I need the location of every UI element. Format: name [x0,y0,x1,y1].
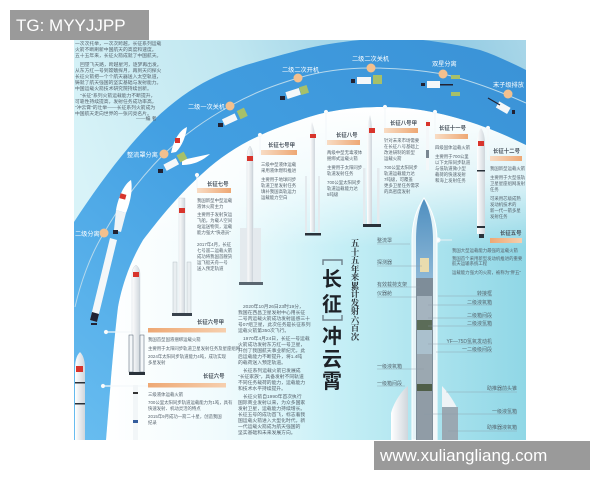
callouts: Long March 5 left: 整流罩 [377,237,392,244]
infographic background [74,40,526,440]
text block: editor's note: "长征"系列火箭运载能力不断提升， [80,92,155,99]
text block: main article: 长征五号的成功首飞，标志着我 [238,411,305,418]
callout leader lines [102,106,490,388]
icon: spacecraft stage 3 [351,75,382,84]
callouts: Long March 5 right [424,290,517,431]
text block: main article: 长征火箭自1990年首次执行 [243,393,302,400]
text: Long March 8: 主要用于太阳同步 [327,164,363,171]
text: Long March 8A: 的高密度发射 [384,188,411,195]
text: Long March 7A: 三级中型液体运载 [261,161,297,168]
text block: main article: 1970年4月24日，长征一号运载 [243,335,310,342]
labels: flight events: 整流罩分离 [127,151,158,159]
heading: Long March 6A [148,318,226,332]
subtitle: vertical: 五 [351,255,360,265]
subtitle: vertical: 五 [351,238,360,248]
text block: editor's note: 长征火箭把一个个航天器送入太空轨道， [75,73,161,80]
rocket: Long March 11 [426,120,430,170]
rocket: Long March 8 [305,122,321,236]
text: Long March 6: 2015年9月成功一箭二十星，创造我国 [148,413,222,420]
text block: editor's note: 中国航天走向世界的一张闪亮名片。 [75,110,152,117]
rocket: Long March 6A [129,265,145,375]
text: Long March 11 [435,144,471,184]
text block: main article: 发射卫星，运载能力持续增长。 [238,405,305,412]
text block: main article: 和技术水平持续提升。 [238,385,286,392]
text block: editor's note: 五十五年来，长征火箭成就了中国航天。 [75,52,161,59]
text block: main article: 的载荷送入预定轨道。 [238,359,286,366]
text: Long March 7: 运飞船天舟一号 [197,259,228,266]
text: Long March 11: 载荷的快速发射 [435,171,466,178]
title: Long March rises to the clouds: 霄 [322,370,342,393]
panel: white glow under arc [106,107,526,440]
text: Long March 5: 我国大型运载能力最强的运载火箭 [452,247,518,254]
text: Long March 7A: 运载能力空白 [261,194,287,201]
text block: editor's note: 火箭不断刷新中国航天的高度和速度。 [75,46,157,53]
rocket: Long March 6 [133,385,138,440]
text block: main article: 开创了我国航天事业新纪元，此 [238,347,305,354]
text block: editor's note: 一次次托举，一次次跨越，长征系列运载 [75,40,162,47]
text: Long March 8: 700公里太阳同步 [327,179,361,186]
text block: main article: 坚实基础和未来发展方向。 [238,429,296,436]
text: Long March 6: 700公里太阳同步轨道运载能力为1吨，具有 [148,399,233,406]
watermark: website: www.xuliangliang.com [379,446,547,465]
text: Long March 12: 主要用于大型低轨 [490,174,526,181]
text block: main article: 长征系列运载火箭已发展成 [243,367,301,374]
icon: separated rocket top [113,180,132,234]
text block: editor's note: 铸就了航天强国的坚实基础与发射能力。 [75,79,161,86]
text: Long March 11: 主要用于700公里 [435,153,469,160]
title: Long March rises to the clouds [322,260,342,393]
icon: spacecraft stage 1 [218,108,248,127]
rocket: lower-left launcher [75,352,85,440]
text block: main article: 火箭成功发射东方红一号卫星， [238,341,305,348]
rocket: Long March 7A [239,146,263,285]
text: Long March 7: 主要用于发射货运 [197,211,233,218]
subtitle: vertical: 十 [351,247,360,257]
text: Long March 8A [384,137,420,195]
icon: spacecraft stage 2 [280,85,309,100]
text: Long March 12: 卫星星座组网发射 [490,180,526,187]
watermark: TG label [10,10,149,40]
text block: main article: "长征家族"，具备发射不同轨道 [238,373,304,380]
text: Long March 7A: 主要用于地球同步 [261,176,297,183]
labels: flight events: 双星分离 [432,60,457,68]
icon: fairing separation [158,127,210,173]
text: Long March 12 [490,165,526,220]
text block: main article: 我国在西昌卫星发射中心用长征 [238,309,305,316]
text: Long March 7: 站运送物资，运载 [197,223,233,230]
text block: editor's note: ——编 者 [136,115,157,122]
text: Long March 12: 新一代一箭多星 [490,207,521,214]
text: Long March 7: 飞船，为载人空间 [197,217,232,224]
heading: Long March 8A: 长征八号甲 [390,119,417,127]
text: Long March 8: 捆绑式运载火箭 [327,155,358,162]
callouts: Long March 5 left: 探测器 [377,259,392,266]
text: Long March 8: 5吨级 [327,191,339,198]
text: Long March 7: 七号遥二运载火箭 [197,247,233,254]
text: Long March 7: 成功将我国首艘货 [197,253,233,260]
callouts: Long March 5 right: 一二级级间段 [462,346,492,353]
callouts: Long March 5 right: 助推器液氧箱 [487,424,517,431]
text: Long March 6A [148,336,241,366]
text: Long March 6A: 主要用于太阳同步轨道卫星发射任务及星座组网 [148,345,241,352]
text: Long March 6A: 多星发射 [148,359,166,366]
text block: main article: 二号丙运载火箭成功发射遥感三十 [238,315,310,322]
heading: Long March 11: 长征十一号 [439,124,467,132]
text block: editor's note: "冲云霄"的壮举——长征系列火箭成为 [75,104,155,111]
text: Long March 7A: 采用液体燃料推进 [261,167,297,174]
rocket: Long March 12 [477,128,485,238]
text: Long March 8A: 在长征八号基础上 [384,143,420,150]
heading: Long March 6A: 长征六号甲 [197,318,224,326]
text: Long March 7A: 填补我国高轨运力 [261,188,296,195]
infographic artwork [74,40,526,440]
heading: Long March 5: 长征五号 [500,229,522,237]
callouts: Long March 5 left: 有效载荷支架 [377,281,407,288]
heading: Long March 8 [327,131,360,145]
text: Long March 7A [261,161,297,201]
text block: main article: 后运载能力不断提升，将1.4吨 [238,353,302,360]
text: Long March 6A: 2024年太阳同步轨道能力4吨，成功实现 [148,353,227,360]
text: Long March 8A: 针对未来市场需要 [384,137,420,144]
text: Long March 7: 送入预定轨道 [197,265,224,272]
rocket: Long March 5 left booster [391,386,408,440]
callouts: Long March 5 left [377,237,424,387]
subtitle: vertical: 年 [351,264,360,274]
text block: editor's note: 中国运载火箭技术研究院持续创新。 [75,85,152,92]
text: Long March 12: 我国新型运载火箭 [490,165,526,172]
heading: Long March 7A: 长征七号甲 [268,141,295,149]
text: Long March 11: 与低轨道微小型 [435,165,466,172]
text: Long March 8A: 运载火箭 [384,155,402,162]
labels: flight events: 二级分离 [75,230,100,238]
title: Long March rises to the clouds: 长 [322,268,342,291]
text: Long March 12: 发动机技术的 [490,201,517,208]
text block: editor's note [75,40,162,122]
text: Long March 11: 四级固体运载火箭 [435,144,471,151]
subtitle: vertical: 百 [351,323,360,333]
text block: main article: 国际商业发射以来，为众多国家 [238,399,305,406]
rocket: Long March 7 [172,198,192,316]
icon: separated rocket lower stage [90,238,117,325]
panel: inner sky area [106,107,526,440]
text: Long March 6: 纪录 [148,419,157,425]
text: Long March 6A: 我国首型固液捆绑运载火箭 [148,336,201,343]
labels: flight events: 二级二次关机 [352,55,390,63]
text: Long March 6: 三级液体运载火箭 [148,391,184,398]
title: Long March rises to the clouds: 征 [322,293,342,316]
text: Long March 8: 两级中型无毒液体 [327,149,363,156]
labels: flight events: 二级一次关机 [188,103,226,111]
callouts: Long March 5 right: 一级液氢箱 [492,408,517,415]
labels: flight events [75,55,524,238]
text: Long March 12: 发射任务 [490,213,508,220]
text: Long March 8A: 7吨级，可覆盖 [384,176,413,183]
text: Long March 12: 任务 [490,186,499,193]
text: Long March 6: 快速发射、机动灵活的特点 [148,405,201,412]
subtitle: vertical: 次 [351,332,360,342]
text block: main article: 不同任务载荷的能力，运载能力 [238,379,305,386]
subtitle: vertical [351,238,361,342]
title: Long March rises to the clouds: 冲 [322,325,342,348]
text: Long March 6 [148,391,233,425]
text block: main article: 国运载火箭进入大型化时代，新 [238,417,305,424]
heading: Long March 7 [197,180,231,193]
text: Long March 7: 2017年4月，长征 [197,241,232,248]
node: fairing / stage events [100,64,512,238]
labels: flight events: 末子级排放 [493,81,524,89]
text: Long March 7: 能力强大"快递员" [197,229,231,236]
text: Long March 8 [327,149,363,198]
text block: main article: 2020年10月26日23时19分， [243,303,304,310]
rocket: Long March 5 right booster [442,386,458,440]
text: Long March 7 [197,197,233,272]
text: Long March 12: 可采用芯级成熟 [490,195,521,202]
text block: main article: 一代运载火箭成为航天强国的 [238,423,301,430]
text block: main article: 运载火箭第350次飞行。 [238,327,289,334]
text: Long March 11: 和海上发射任务 [435,177,466,184]
heading: Long March 6 [148,372,226,388]
callouts: Long March 5 right: 二级液氢箱 [467,320,492,327]
callouts: Long March 5 right: 助推器前头锥 [487,385,517,392]
text: Long March 8: 轨道运载能力达 [327,185,358,192]
text: Long March 7: 液体火箭主力 [197,203,223,210]
subtitle: vertical: 六 [351,315,361,325]
text block: editor's note: 可靠性持续提高，发射任务成功率高， [75,98,157,105]
title: Long March rises to the clouds: 云 [322,349,342,371]
subtitle: vertical: 计 [351,289,360,299]
callouts: Long March 5 right: 二级液氧箱 [467,299,492,306]
rocket: Long March 5 cutaway [412,198,437,440]
callouts: Long March 5 right: 二级箱间段 [467,312,492,319]
panel: blue orbit band [74,40,526,440]
text: Long March 8: 轨道发射任务 [327,170,354,177]
text: Long March 5: 航天运输系统工程 [452,260,488,267]
heading: Long March 6: 长征六号 [203,372,225,380]
callouts: Long March 5 left: 一级箱间段 [377,380,402,387]
heading: Long March 7A [261,141,297,155]
rocket: Long March 8A [363,115,381,227]
text: Long March 5: 我国首个采用新型发动机推进的重要 [452,255,523,262]
callouts: Long March 5 left: 仪器舱 [377,290,392,297]
text block: editor's note: 从东方红一号到嫦娥探月，再到天问探火 [75,67,162,74]
text block: main article: 号07组卫星，此次任务是长征系列 [238,321,311,328]
watermark: TG label: TG: MYYJJPP [16,16,126,35]
watermark: website [374,441,590,470]
text: Long March 8A: 更多卫星任务需求 [384,182,420,189]
icon: upper stage venting [488,98,515,114]
subtitle: vertical: 射 [351,306,360,316]
text: Long March 7A: 轨道卫星发射任务 [261,182,297,189]
callouts: Long March 5 left: 一级液氧箱 [377,363,402,370]
subtitle: vertical: 累 [351,281,360,291]
text: Long March 5: 运载能力强大的火箭，被称为"胖五" [452,269,521,276]
heading: Long March 8: 长征八号 [336,131,358,139]
heading: Long March 11 [435,124,468,139]
text: Long March 8A: 700公里太阳同步 [384,164,418,171]
heading: Long March 5 [490,229,522,243]
text block: editor's note: 回望飞天路，跨越星河，逐梦再出发。 [80,61,162,68]
callouts: Long March 5 right: YF—75D氢氧发动机 [446,338,492,345]
labels: flight events: 二级二次开机 [282,66,320,74]
text: Long March 7: 我国新型中型运载 [197,197,233,204]
heading: Long March 8A [384,119,418,133]
heading: Long March 12 [490,147,522,161]
orbit line [75,68,526,307]
subtitle: vertical: 来 [351,272,360,282]
icon: satellite separation [421,75,460,96]
heading: Long March 12: 长征十二号 [493,147,521,155]
text: Long March 8A: 改进研制的新型 [384,149,415,156]
text block: main article [238,303,311,436]
text: Long March 11: 以下太阳同步轨道 [435,159,471,166]
subtitle: vertical: 发 [351,298,360,308]
callouts: Long March 5 right: 转接框 [477,290,492,297]
text: Long March 5 [452,247,523,276]
heading: Long March 7: 长征七号 [207,180,229,188]
text: Long March 8A: 轨道运载能力达 [384,170,415,177]
